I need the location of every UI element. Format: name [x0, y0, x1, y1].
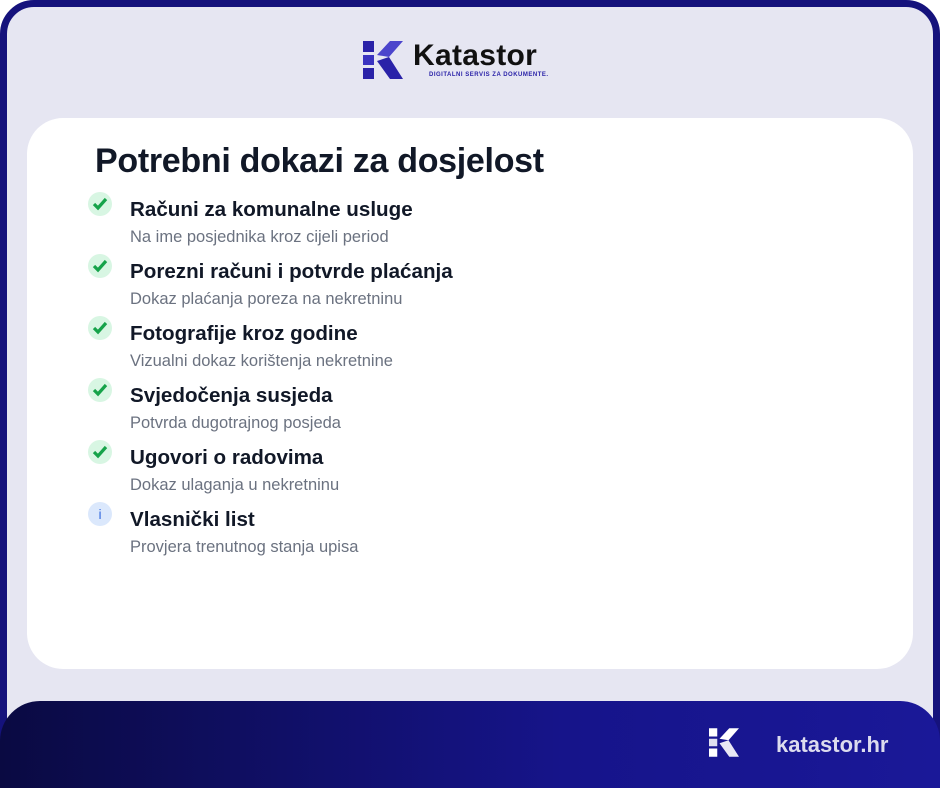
item 4: Potvrda dugotrajnog posjeda: [130, 414, 341, 432]
item 4: Svjedočenja susjeda: [130, 384, 333, 407]
footer: [0, 701, 940, 788]
item 6: Provjera trenutnog stanja upisa: [130, 538, 358, 556]
item 6: [88, 502, 358, 556]
item 4: [88, 378, 341, 432]
item 6: Vlasnički list: [130, 508, 255, 531]
item 1: [88, 192, 413, 246]
item 6: i: [98, 506, 102, 522]
item 2: Dokaz plaćanja poreza na nekretninu: [130, 290, 402, 308]
icon: logo mark: [363, 41, 403, 79]
item 5: Ugovori o radovima: [130, 446, 323, 469]
item 5: Dokaz ulaganja u nekretninu: [130, 476, 339, 494]
item 3: Vizualni dokaz korištenja nekretnine: [130, 352, 393, 370]
item 2: Porezni računi i potvrde plaćanja: [130, 260, 453, 283]
item 5: [88, 440, 339, 494]
item 1: Računi za komunalne usluge: [130, 198, 413, 221]
item 2: [88, 254, 453, 308]
title: Potrebni dokazi za dosjelost: [95, 142, 544, 180]
footer url: katastor.hr: [776, 732, 888, 757]
logo text: Katastor: [413, 39, 537, 72]
item 1: Na ime posjednika kroz cijeli period: [130, 228, 389, 246]
icon: footer logo: [709, 728, 739, 757]
logo: [363, 39, 549, 79]
item 3: [88, 316, 393, 370]
item 3: Fotografije kroz godine: [130, 322, 358, 345]
logo: DIGITALNI SERVIS ZA DOKUMENTE.: [429, 72, 549, 78]
panel: evidence card: [27, 118, 913, 669]
